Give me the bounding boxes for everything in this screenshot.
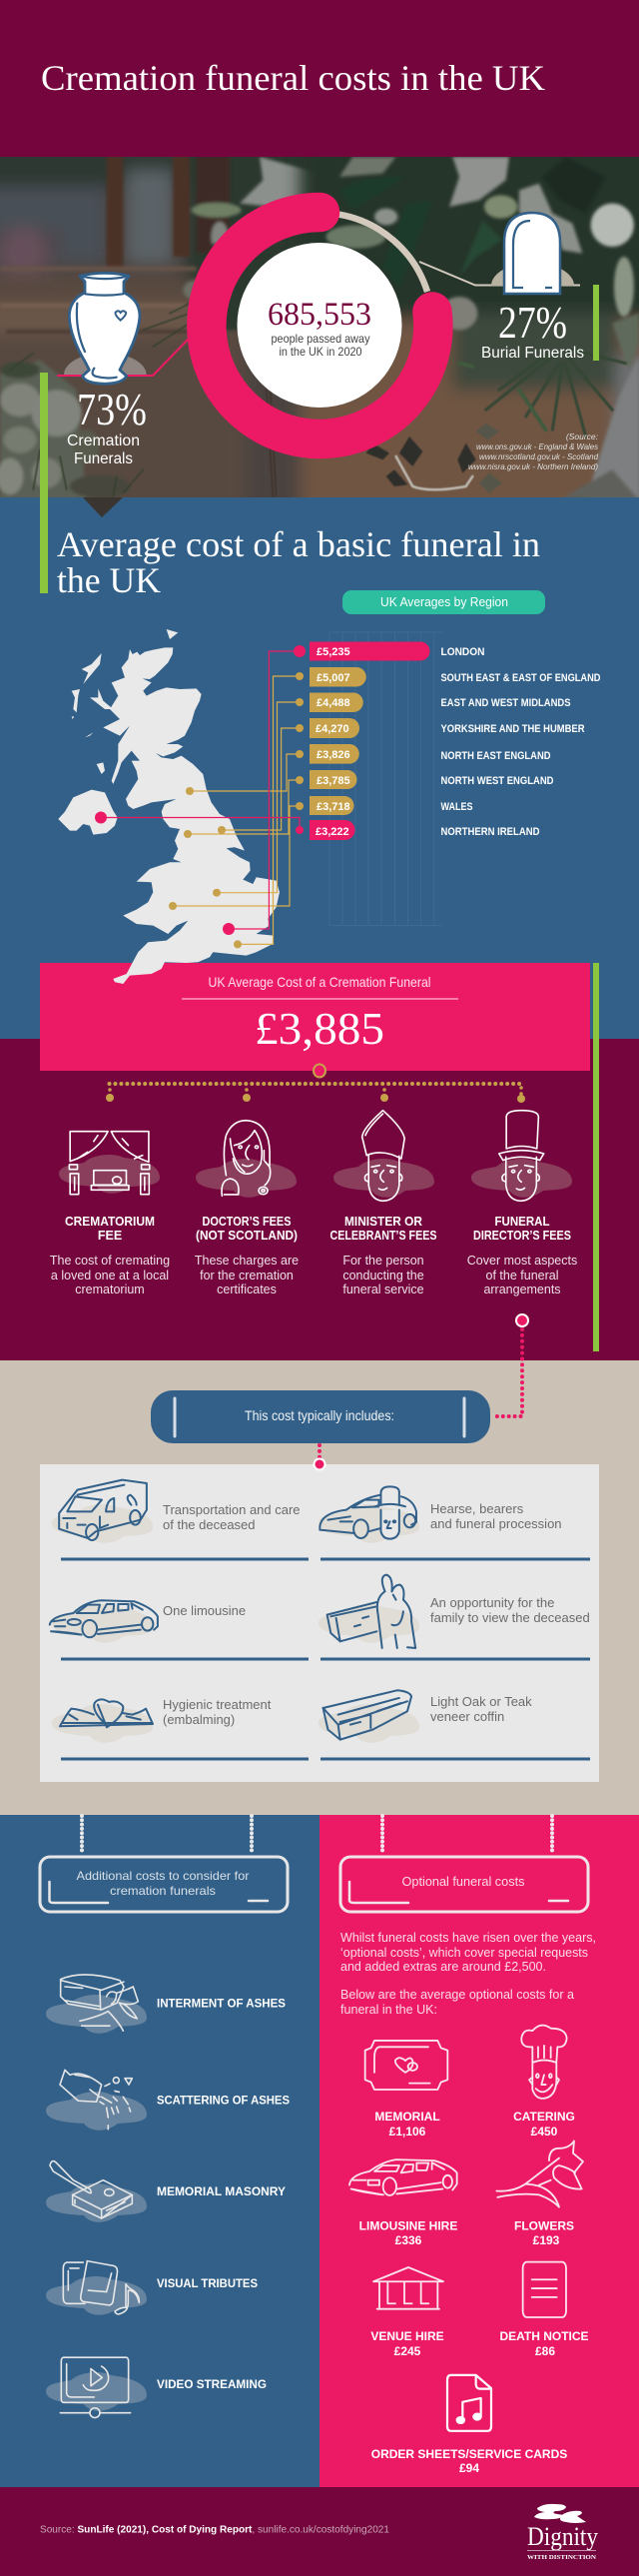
bar: Midlands [310, 693, 571, 712]
item: interment of ashes [46, 1975, 286, 2034]
item: coffin: Light Oak or Teak [430, 1694, 532, 1709]
item: hearse [319, 1486, 562, 1543]
icon: gravestone [491, 213, 574, 294]
option: order sheets: £94 [459, 2461, 479, 2475]
option: catering: CATERING [513, 2110, 575, 2124]
option: flowers: FLOWERS [514, 2219, 574, 2233]
islands [72, 629, 178, 774]
logo: Dignity: Dignity [527, 2522, 598, 2551]
source note: www.nrscotland.gov.uk - Scotland [479, 451, 598, 461]
item: interment of ashes: INTERMENT OF ASHES [157, 1996, 286, 2010]
item: video streaming: VIDEO STREAMING [157, 2377, 267, 2391]
sign: optional funeral costs: Optional funeral costs [401, 1875, 525, 1889]
bar: London: £5,235 [317, 646, 350, 658]
connectors [101, 651, 300, 944]
stat: burial: 27% [498, 297, 567, 348]
bar: North East: £3,826 [317, 749, 350, 761]
fee: minister: conducting the [342, 1269, 424, 1283]
fee: crematorium: The cost of cremating [50, 1254, 170, 1268]
fee: doctor: These charges are [195, 1254, 299, 1268]
item: memorial masonry: MEMORIAL MASONRY [157, 2184, 286, 2198]
option: venue hire: VENUE HIRE [370, 2329, 444, 2343]
heading [57, 524, 540, 600]
icon: urn [57, 273, 147, 384]
item: transportation [52, 1480, 301, 1543]
fee: doctor: DOCTOR’S FEES [202, 1215, 292, 1229]
item: viewing the deceased: An opportunity for the [430, 1595, 554, 1610]
panel: what the cost includes [0, 1314, 639, 1815]
option: memorial: MEMORIAL [374, 2110, 440, 2124]
fee: minister: funeral service [342, 1283, 424, 1296]
fee: funeral director: FUNERAL [495, 1215, 550, 1229]
bar: Midlands: EAST AND WEST MIDLANDS [441, 697, 571, 709]
option: memorial: £1,106 [389, 2125, 426, 2139]
option: death notice: £86 [535, 2344, 555, 2358]
chart: regional costs [95, 641, 601, 948]
sign: optional funeral costs [340, 1857, 588, 1912]
fee: crematorium: CREMATORIUM [65, 1215, 155, 1229]
item: visual tributes: VISUAL TRIBUTES [157, 2276, 258, 2290]
item: hygienic treatment [52, 1697, 272, 1743]
stat: cremation: Funerals [74, 450, 133, 467]
bar: Midlands: £4,488 [317, 697, 350, 709]
heading: Average cost of a basic funeral in [57, 524, 540, 564]
pill: UK averages by region: UK Averages by Region [380, 594, 508, 609]
burial leader line [419, 262, 580, 286]
donut chart: 73% cremation, 27% burial [207, 212, 433, 438]
intro paragraph [340, 1931, 596, 2017]
photo background: coffin and flowers [0, 157, 639, 497]
average cost figure: £3,885 [255, 1003, 384, 1054]
bar: Wales [310, 796, 473, 815]
item: coffin [319, 1690, 532, 1743]
panel: average cost of a basic funeral [0, 497, 639, 1039]
item: transportation: Transportation and care [163, 1502, 301, 1517]
option: limousine hire: £336 [395, 2233, 422, 2247]
bar: Yorkshire [310, 718, 585, 738]
option: limousine hire: LIMOUSINE HIRE [359, 2219, 457, 2233]
option: catering: £450 [531, 2125, 558, 2139]
bar: North East [310, 744, 551, 764]
item: hearse: and funeral procession [430, 1516, 562, 1531]
intro paragraph: Below are the average optional costs for a [340, 1988, 574, 2002]
intro paragraph: ‘optional costs’, which cover special requests [340, 1946, 588, 1960]
fee: crematorium: a loved one at a local [51, 1269, 169, 1283]
icon: funeral director top hat [471, 1111, 572, 1201]
item: scattering of ashes [46, 2070, 290, 2131]
stat: cremation [67, 384, 147, 467]
bar: South East [310, 667, 601, 687]
notch from photo [83, 497, 123, 517]
item: limousine: One limousine [163, 1603, 246, 1618]
fee: funeral director [467, 1215, 577, 1296]
option: death notice: DEATH NOTICE [499, 2329, 589, 2343]
accent bars [40, 285, 599, 1351]
fee: funeral director: DIRECTOR’S FEES [473, 1229, 571, 1243]
fee: minister: For the person [342, 1254, 424, 1268]
option: flowers [496, 2141, 583, 2247]
icon: minister [333, 1111, 434, 1201]
logo: Dignity [527, 2504, 598, 2561]
source note: www.nisra.gov.uk - Northern Ireland) [468, 461, 598, 471]
option: venue hire [370, 2267, 444, 2358]
fee: funeral director: arrangements [483, 1283, 561, 1296]
item: visual tributes [46, 2261, 258, 2315]
chart grid [329, 632, 442, 925]
fee labels and descriptions [50, 1215, 577, 1296]
option: death notice [499, 2262, 589, 2358]
sign: additional costs [40, 1857, 288, 1912]
intro paragraph: and added extras are around £2,500. [340, 1960, 546, 1974]
option: catering [513, 2026, 575, 2139]
fee: funeral director: Cover most aspects [467, 1254, 577, 1268]
cremation leader line [57, 339, 189, 376]
item: limousine [50, 1600, 246, 1643]
source note: www.ons.gov.uk - England & Wales [476, 441, 599, 451]
pill: this cost typically includes [151, 1390, 490, 1443]
item: viewing the deceased [319, 1575, 590, 1648]
fee: doctor: for the cremation [200, 1269, 294, 1283]
icon: crematorium curtains [59, 1132, 160, 1195]
option: flowers: £193 [533, 2233, 560, 2247]
panel: UK average cost box [40, 963, 590, 1071]
bar: Wales: WALES [441, 801, 473, 813]
fee: crematorium: FEE [98, 1229, 122, 1243]
icon: doctor [196, 1121, 297, 1198]
fee: doctor: (NOT SCOTLAND) [196, 1229, 298, 1243]
option: order sheets [371, 2375, 567, 2475]
bar: Northern Ireland [310, 820, 540, 840]
fee: doctor [195, 1215, 299, 1296]
option: memorial [365, 2041, 447, 2139]
bar: Northern Ireland: NORTHERN IRELAND [441, 826, 540, 838]
stat: burial [481, 297, 584, 362]
fee: crematorium: crematorium [75, 1283, 145, 1296]
stat: cremation: 73% [77, 384, 147, 434]
item: hygienic treatment: (embalming) [163, 1712, 235, 1727]
option: order sheets: ORDER SHEETS/SERVICE CARDS [371, 2447, 567, 2461]
bar: North West [310, 770, 554, 789]
map markers [169, 672, 304, 948]
item: viewing the deceased: family to view the deceased [430, 1610, 590, 1625]
logo: Dignity: WITH DISTINCTION [527, 2554, 596, 2561]
heading: the UK [57, 560, 161, 600]
option: venue hire: £245 [394, 2344, 421, 2358]
item: coffin: veneer coffin [430, 1709, 504, 1724]
sign: additional costs: Additional costs to consider for [76, 1869, 250, 1883]
total caption [272, 332, 369, 359]
item: video streaming [46, 2357, 267, 2418]
bar: South East: SOUTH EAST & EAST OF ENGLAND [441, 672, 601, 684]
item: hearse: Hearse, bearers [430, 1501, 524, 1516]
item: transportation: of the deceased [163, 1517, 256, 1532]
pill: this cost typically includes: This cost typically includes: [245, 1407, 394, 1423]
total caption: in the UK in 2020 [280, 345, 362, 359]
bar: London: LONDON [441, 646, 485, 658]
total caption: people passed away [272, 332, 369, 346]
title: Cremation funeral costs in the UK [41, 58, 545, 98]
box label: UK Average Cost of a Cremation Funeral [208, 974, 431, 990]
footer [0, 2487, 639, 2576]
Northern Ireland [58, 790, 118, 835]
fee: minister [329, 1215, 437, 1296]
bar: South East: £5,007 [317, 672, 350, 684]
option: limousine hire [349, 2159, 457, 2247]
map of the UK [58, 629, 280, 984]
bar: London [310, 641, 485, 661]
stat: burial: Burial Funerals [481, 345, 584, 362]
source note: (Source: [566, 431, 599, 441]
source line: Source: SunLife (2021), Cost of Dying Report, sunlife.co.uk/costofdying2021 [40, 2523, 389, 2535]
panel: additional costs [0, 1815, 320, 2487]
source note [468, 431, 599, 471]
stat: cremation: Cremation [67, 432, 140, 449]
fee: minister: CELEBRANT’S FEES [329, 1229, 437, 1243]
bar: North East: NORTH EAST ENGLAND [441, 750, 551, 762]
item: memorial masonry [46, 2161, 286, 2222]
fee: minister: MINISTER OR [344, 1215, 422, 1229]
fee: funeral director: of the funeral [486, 1269, 558, 1283]
bar: North West: £3,785 [317, 775, 350, 787]
item: scattering of ashes: SCATTERING OF ASHES [157, 2094, 290, 2108]
sign: additional costs: cremation funerals [110, 1884, 216, 1898]
total figure: 685,553 [268, 297, 371, 333]
panel: optional funeral costs [320, 1815, 639, 2487]
bar: Yorkshire: YORKSHIRE AND THE HUMBER [441, 723, 585, 735]
intro paragraph: funeral in the UK: [340, 2003, 437, 2017]
bar: Yorkshire: £4,270 [316, 723, 349, 735]
pill: UK averages by region [342, 590, 545, 614]
fee: crematorium [50, 1215, 170, 1296]
inclusions card [40, 1458, 599, 1782]
bar: North West: NORTH WEST ENGLAND [441, 775, 554, 787]
intro paragraph: Whilst funeral costs have risen over the years, [340, 1931, 596, 1945]
panel: maroon fees background [0, 1039, 639, 1360]
header band [0, 0, 639, 157]
bar: Northern Ireland: £3,222 [316, 826, 349, 838]
item: hygienic treatment: Hygienic treatment [163, 1697, 272, 1712]
bar: Wales: £3,718 [317, 801, 350, 813]
connector: gold dotted tree [106, 1065, 525, 1103]
fee: doctor: certificates [217, 1283, 277, 1296]
connector: pink dotted [491, 1314, 528, 1416]
